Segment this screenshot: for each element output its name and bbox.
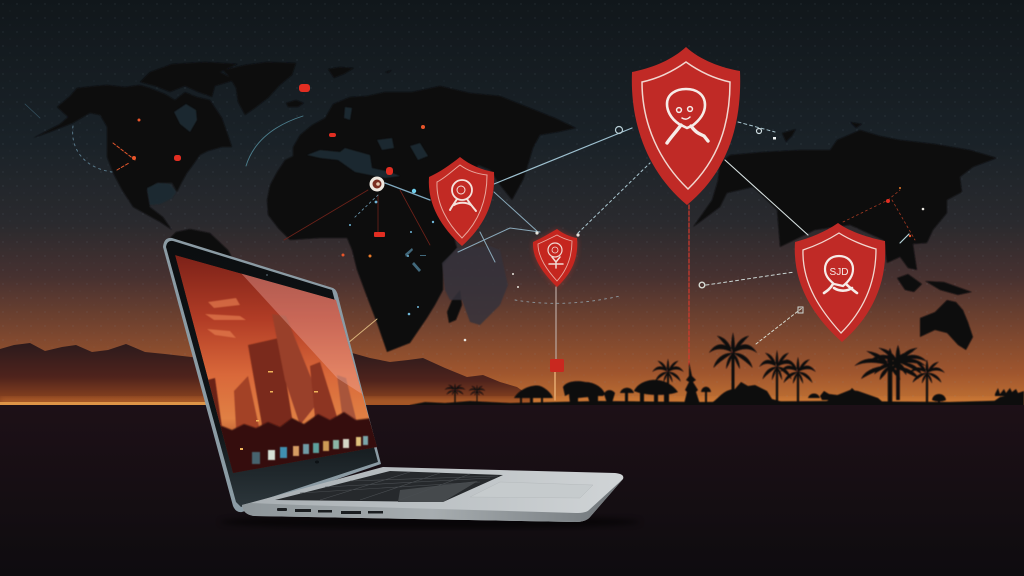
mountains bbox=[0, 343, 534, 405]
line: big shield to right node bbox=[738, 122, 775, 132]
sky background bbox=[0, 0, 1024, 406]
screen dock icons bbox=[252, 436, 368, 464]
keyboard key grid bbox=[300, 472, 498, 500]
shield: left bbox=[429, 157, 494, 246]
line: big to right shield bbox=[725, 160, 808, 235]
marker: blue points bbox=[349, 189, 434, 315]
map markers bbox=[132, 84, 924, 372]
marker: ring node lower right bbox=[798, 307, 803, 313]
world map bbox=[33, 62, 997, 352]
map: eurasia east bbox=[693, 130, 997, 270]
map: australia bbox=[920, 300, 973, 350]
base front edge bbox=[242, 479, 623, 522]
grass bbox=[995, 388, 1024, 396]
map: northern scrap bbox=[782, 122, 862, 142]
laptop bbox=[163, 238, 640, 529]
small trees bbox=[620, 387, 946, 404]
keyboard lower block bbox=[398, 481, 478, 502]
shield: large top bbox=[632, 47, 740, 205]
bird plant bbox=[820, 388, 855, 400]
icon: skull bbox=[450, 180, 476, 211]
line: asia red threads bbox=[843, 190, 915, 240]
marker: red blobs bbox=[132, 84, 911, 258]
keyboard bbox=[275, 471, 503, 502]
shield: right bbox=[795, 223, 885, 342]
line: laptop to africa bbox=[348, 319, 377, 343]
map: indian ocean plate bbox=[442, 246, 508, 325]
line: left shield to big shield bbox=[494, 128, 632, 184]
line: small shield vertical bbox=[555, 287, 557, 362]
line: alaska fin bbox=[25, 104, 40, 118]
marker: white points bbox=[464, 208, 924, 341]
connection lines bbox=[25, 104, 915, 400]
laptop lid bbox=[163, 238, 381, 512]
palms bbox=[444, 332, 945, 406]
marker: ring node lower bbox=[699, 282, 705, 288]
silhouettes bbox=[410, 332, 1024, 407]
hut right bbox=[634, 380, 678, 404]
map: southeast asia islands bbox=[897, 274, 972, 295]
mountains right bbox=[330, 351, 534, 405]
marker: ring node top bbox=[616, 126, 622, 134]
trackpad bbox=[470, 482, 593, 498]
ground bbox=[0, 405, 1024, 576]
line: node to left shield bbox=[385, 183, 430, 200]
line: big shield left dotted bbox=[578, 163, 650, 233]
map: south america top bbox=[168, 229, 240, 290]
laptop base shadow bbox=[220, 515, 640, 529]
map: europe africa mass bbox=[267, 86, 576, 352]
line: shield to small shield bbox=[458, 192, 540, 262]
line: america red bbox=[113, 143, 135, 170]
laptop base bbox=[242, 467, 623, 522]
map: arctic islands bbox=[140, 62, 238, 97]
icon: small skull bbox=[548, 243, 563, 268]
webcam bbox=[266, 274, 268, 276]
horizon glow bbox=[0, 397, 1024, 405]
ground fringe bbox=[410, 400, 1024, 407]
screen buildings bbox=[208, 314, 356, 435]
map: greenland bbox=[223, 62, 296, 115]
line: atlantic arc bbox=[246, 116, 303, 166]
line: pacific dotted arc bbox=[73, 126, 112, 172]
marker: ring node right bbox=[756, 128, 762, 134]
elephant shapes bbox=[563, 381, 605, 404]
mountains left bbox=[0, 343, 240, 405]
line: africa red threads bbox=[284, 190, 430, 245]
map: north america bbox=[33, 85, 232, 230]
logo bbox=[315, 460, 319, 464]
ports bbox=[277, 508, 383, 514]
line: dotted to right shield bbox=[706, 272, 795, 285]
pagoda tower bbox=[684, 362, 700, 404]
screen trees bbox=[220, 411, 377, 473]
screen window lights bbox=[240, 371, 318, 450]
marker: white dot bbox=[773, 137, 776, 140]
line: big shield vertical red bbox=[688, 205, 690, 365]
mounds bbox=[710, 382, 1024, 405]
screen clouds bbox=[205, 298, 246, 338]
marker: white node bbox=[370, 176, 384, 192]
map: seas and lakes bbox=[147, 104, 428, 205]
icon: right skull bbox=[824, 256, 857, 293]
hut center bbox=[514, 386, 553, 405]
map: iceland and svalbard bbox=[286, 67, 392, 107]
line: lower dotted to right shield bbox=[756, 308, 802, 344]
line: small shield dotted bbox=[515, 296, 620, 303]
map: madagascar bbox=[447, 290, 462, 323]
shield: small center bbox=[533, 229, 577, 287]
laptop screen bbox=[175, 255, 380, 476]
icon: large skull bbox=[667, 89, 708, 143]
text: shield glyphs: SJD bbox=[830, 267, 848, 278]
screen glare bbox=[240, 272, 362, 394]
marker: red box on pole bbox=[550, 359, 564, 372]
